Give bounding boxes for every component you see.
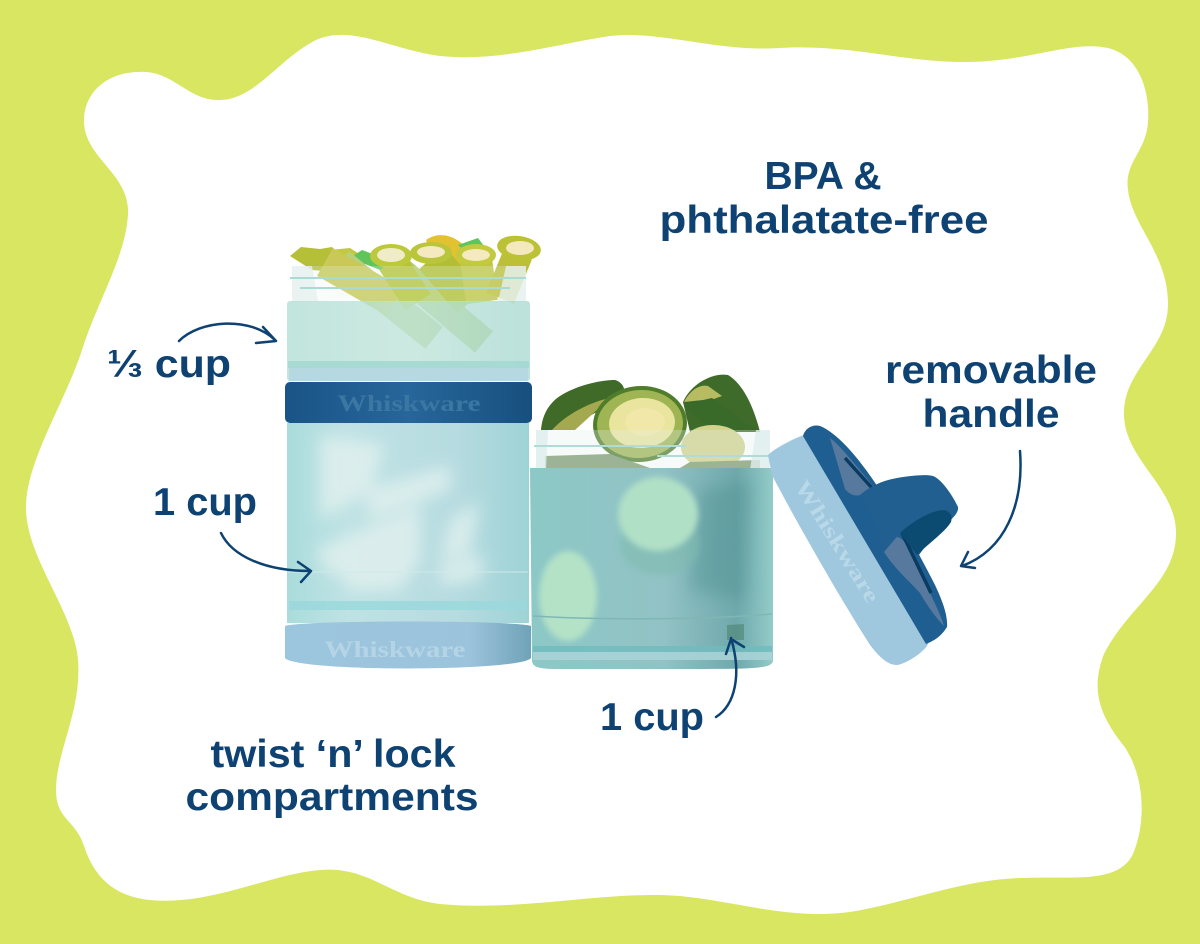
label: twist n lock compartments: twist ‘n’ lock xyxy=(210,733,456,776)
title: BPA and phthalatate-free: phthalatate-free xyxy=(660,199,988,242)
label: one third cup xyxy=(107,324,276,386)
arrow to right container xyxy=(716,638,744,717)
label: removable handle xyxy=(885,349,1097,568)
clear rim xyxy=(534,430,772,470)
handle hole xyxy=(900,510,952,555)
left container stack xyxy=(285,233,542,668)
handle loop xyxy=(860,475,958,555)
right container xyxy=(530,375,773,669)
label: 1 cup right xyxy=(600,638,744,739)
label: twist n lock compartments xyxy=(186,733,478,819)
title: BPA and phthalatate-free: BPA & xyxy=(764,155,882,198)
dark blue ring: Whiskware xyxy=(338,391,480,416)
cucumber slices xyxy=(541,375,760,469)
label: twist n lock compartments: compartments xyxy=(186,776,478,819)
frosted band one-third cup xyxy=(287,301,530,381)
light blue base: Whiskware xyxy=(324,637,466,662)
label: removable handle: handle xyxy=(922,393,1060,436)
lid side band xyxy=(768,435,930,665)
label: removable handle: removable xyxy=(885,349,1097,392)
title: BPA and phthalatate-free xyxy=(660,155,988,242)
label: one third cup: ⅓ cup xyxy=(107,343,231,386)
upper lid opening xyxy=(830,438,873,496)
lid with removable handle: Whiskware xyxy=(790,475,885,608)
arrow to handle xyxy=(961,451,1021,568)
arrow to lower compartment xyxy=(221,533,311,582)
label: 1 cup left xyxy=(153,481,311,582)
lid dark top xyxy=(803,425,947,644)
arrow to top compartment xyxy=(179,324,276,343)
lower lid opening xyxy=(884,537,944,626)
snack sticks xyxy=(290,233,542,342)
clear rim xyxy=(290,266,526,302)
light blue base xyxy=(285,622,531,668)
label: 1 cup right: 1 cup xyxy=(600,696,704,739)
lid with removable handle xyxy=(768,425,958,665)
lower frosted jar 1 cup xyxy=(287,423,529,623)
label: 1 cup left: 1 cup xyxy=(153,481,257,524)
frosted body xyxy=(530,468,773,669)
dark blue ring xyxy=(285,382,532,423)
